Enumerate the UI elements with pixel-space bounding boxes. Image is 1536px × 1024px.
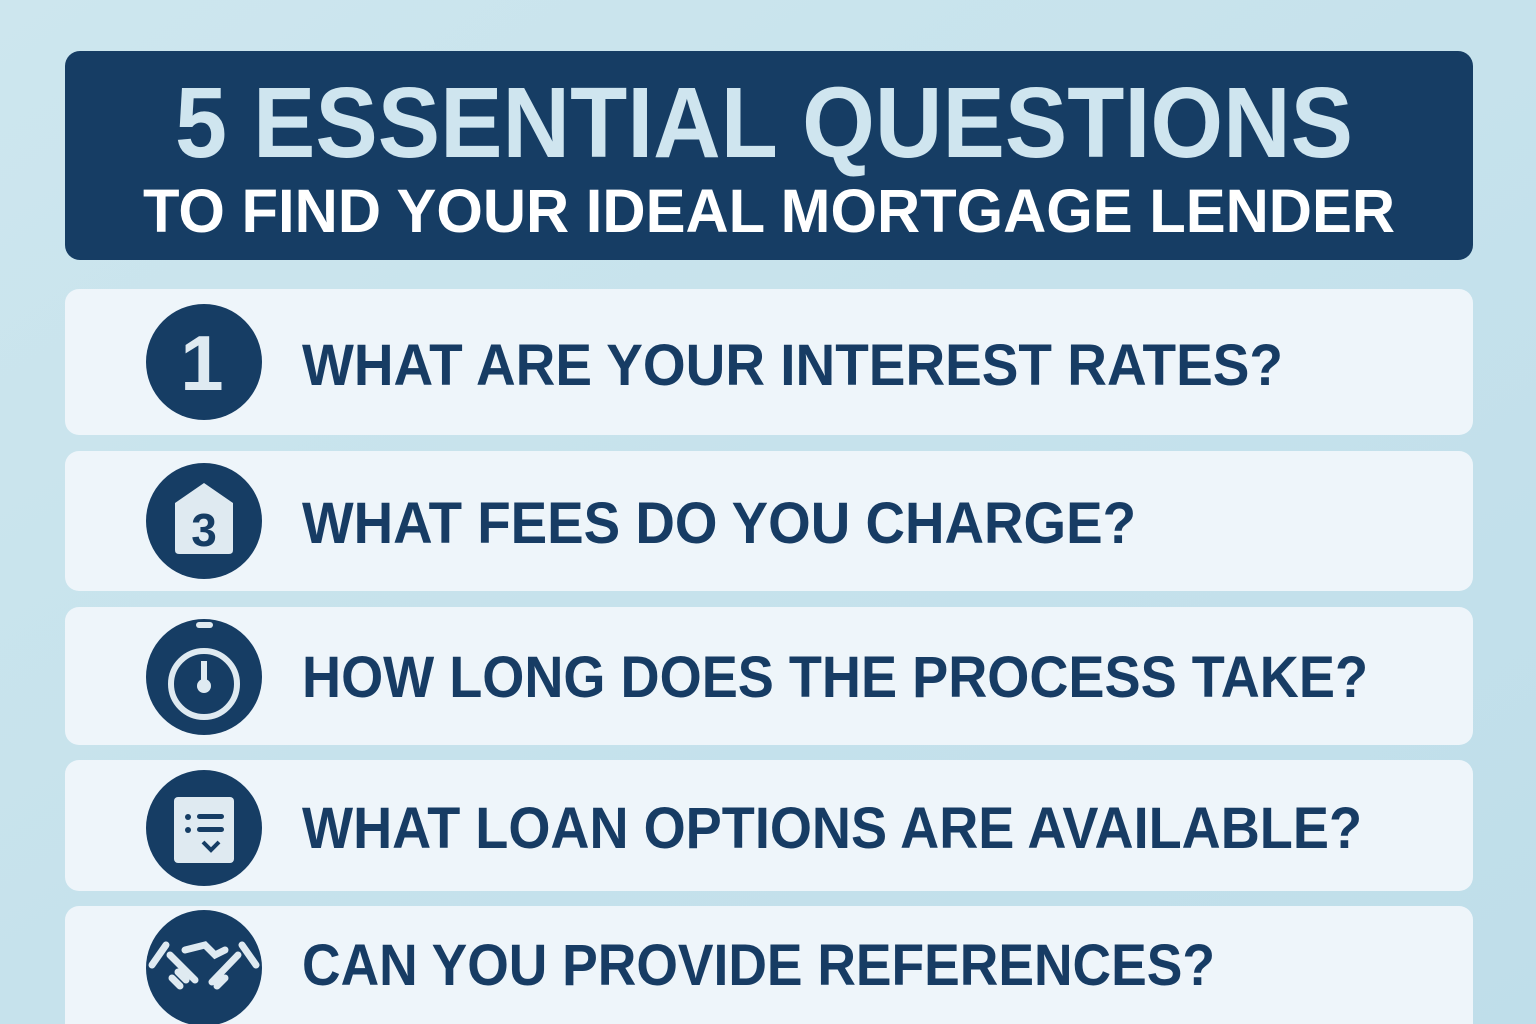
icon: number 1: 1 — [180, 319, 224, 407]
question 3 text: HOW LONG DOES THE PROCESS TAKE? — [302, 645, 1368, 710]
icon: number 1 — [146, 304, 262, 420]
question 4 text: WHAT LOAN OPTIONS ARE AVAILABLE? — [302, 796, 1362, 861]
question 1 text: WHAT ARE YOUR INTEREST RATES? — [302, 333, 1283, 398]
icon: house with dollar — [146, 463, 262, 579]
title: 5 ESSENTIAL QUESTIONS — [175, 67, 1353, 179]
question 2 text: WHAT FEES DO YOU CHARGE? — [302, 491, 1136, 556]
card 4: loan options — [65, 760, 1473, 891]
header banner — [65, 51, 1473, 260]
card 5: references — [65, 906, 1473, 1024]
card 3: process time — [65, 607, 1473, 745]
icon: stopwatch — [146, 619, 262, 735]
card 2: fees — [65, 451, 1473, 591]
card 1: interest rates — [65, 289, 1473, 435]
question 5 text: CAN YOU PROVIDE REFERENCES? — [302, 933, 1215, 998]
icon: house with dollar: 3 — [191, 504, 217, 556]
subtitle: TO FIND YOUR IDEAL MORTGAGE LENDER — [143, 177, 1395, 245]
icon: checklist — [146, 770, 262, 886]
icon: handshake — [146, 910, 262, 1024]
